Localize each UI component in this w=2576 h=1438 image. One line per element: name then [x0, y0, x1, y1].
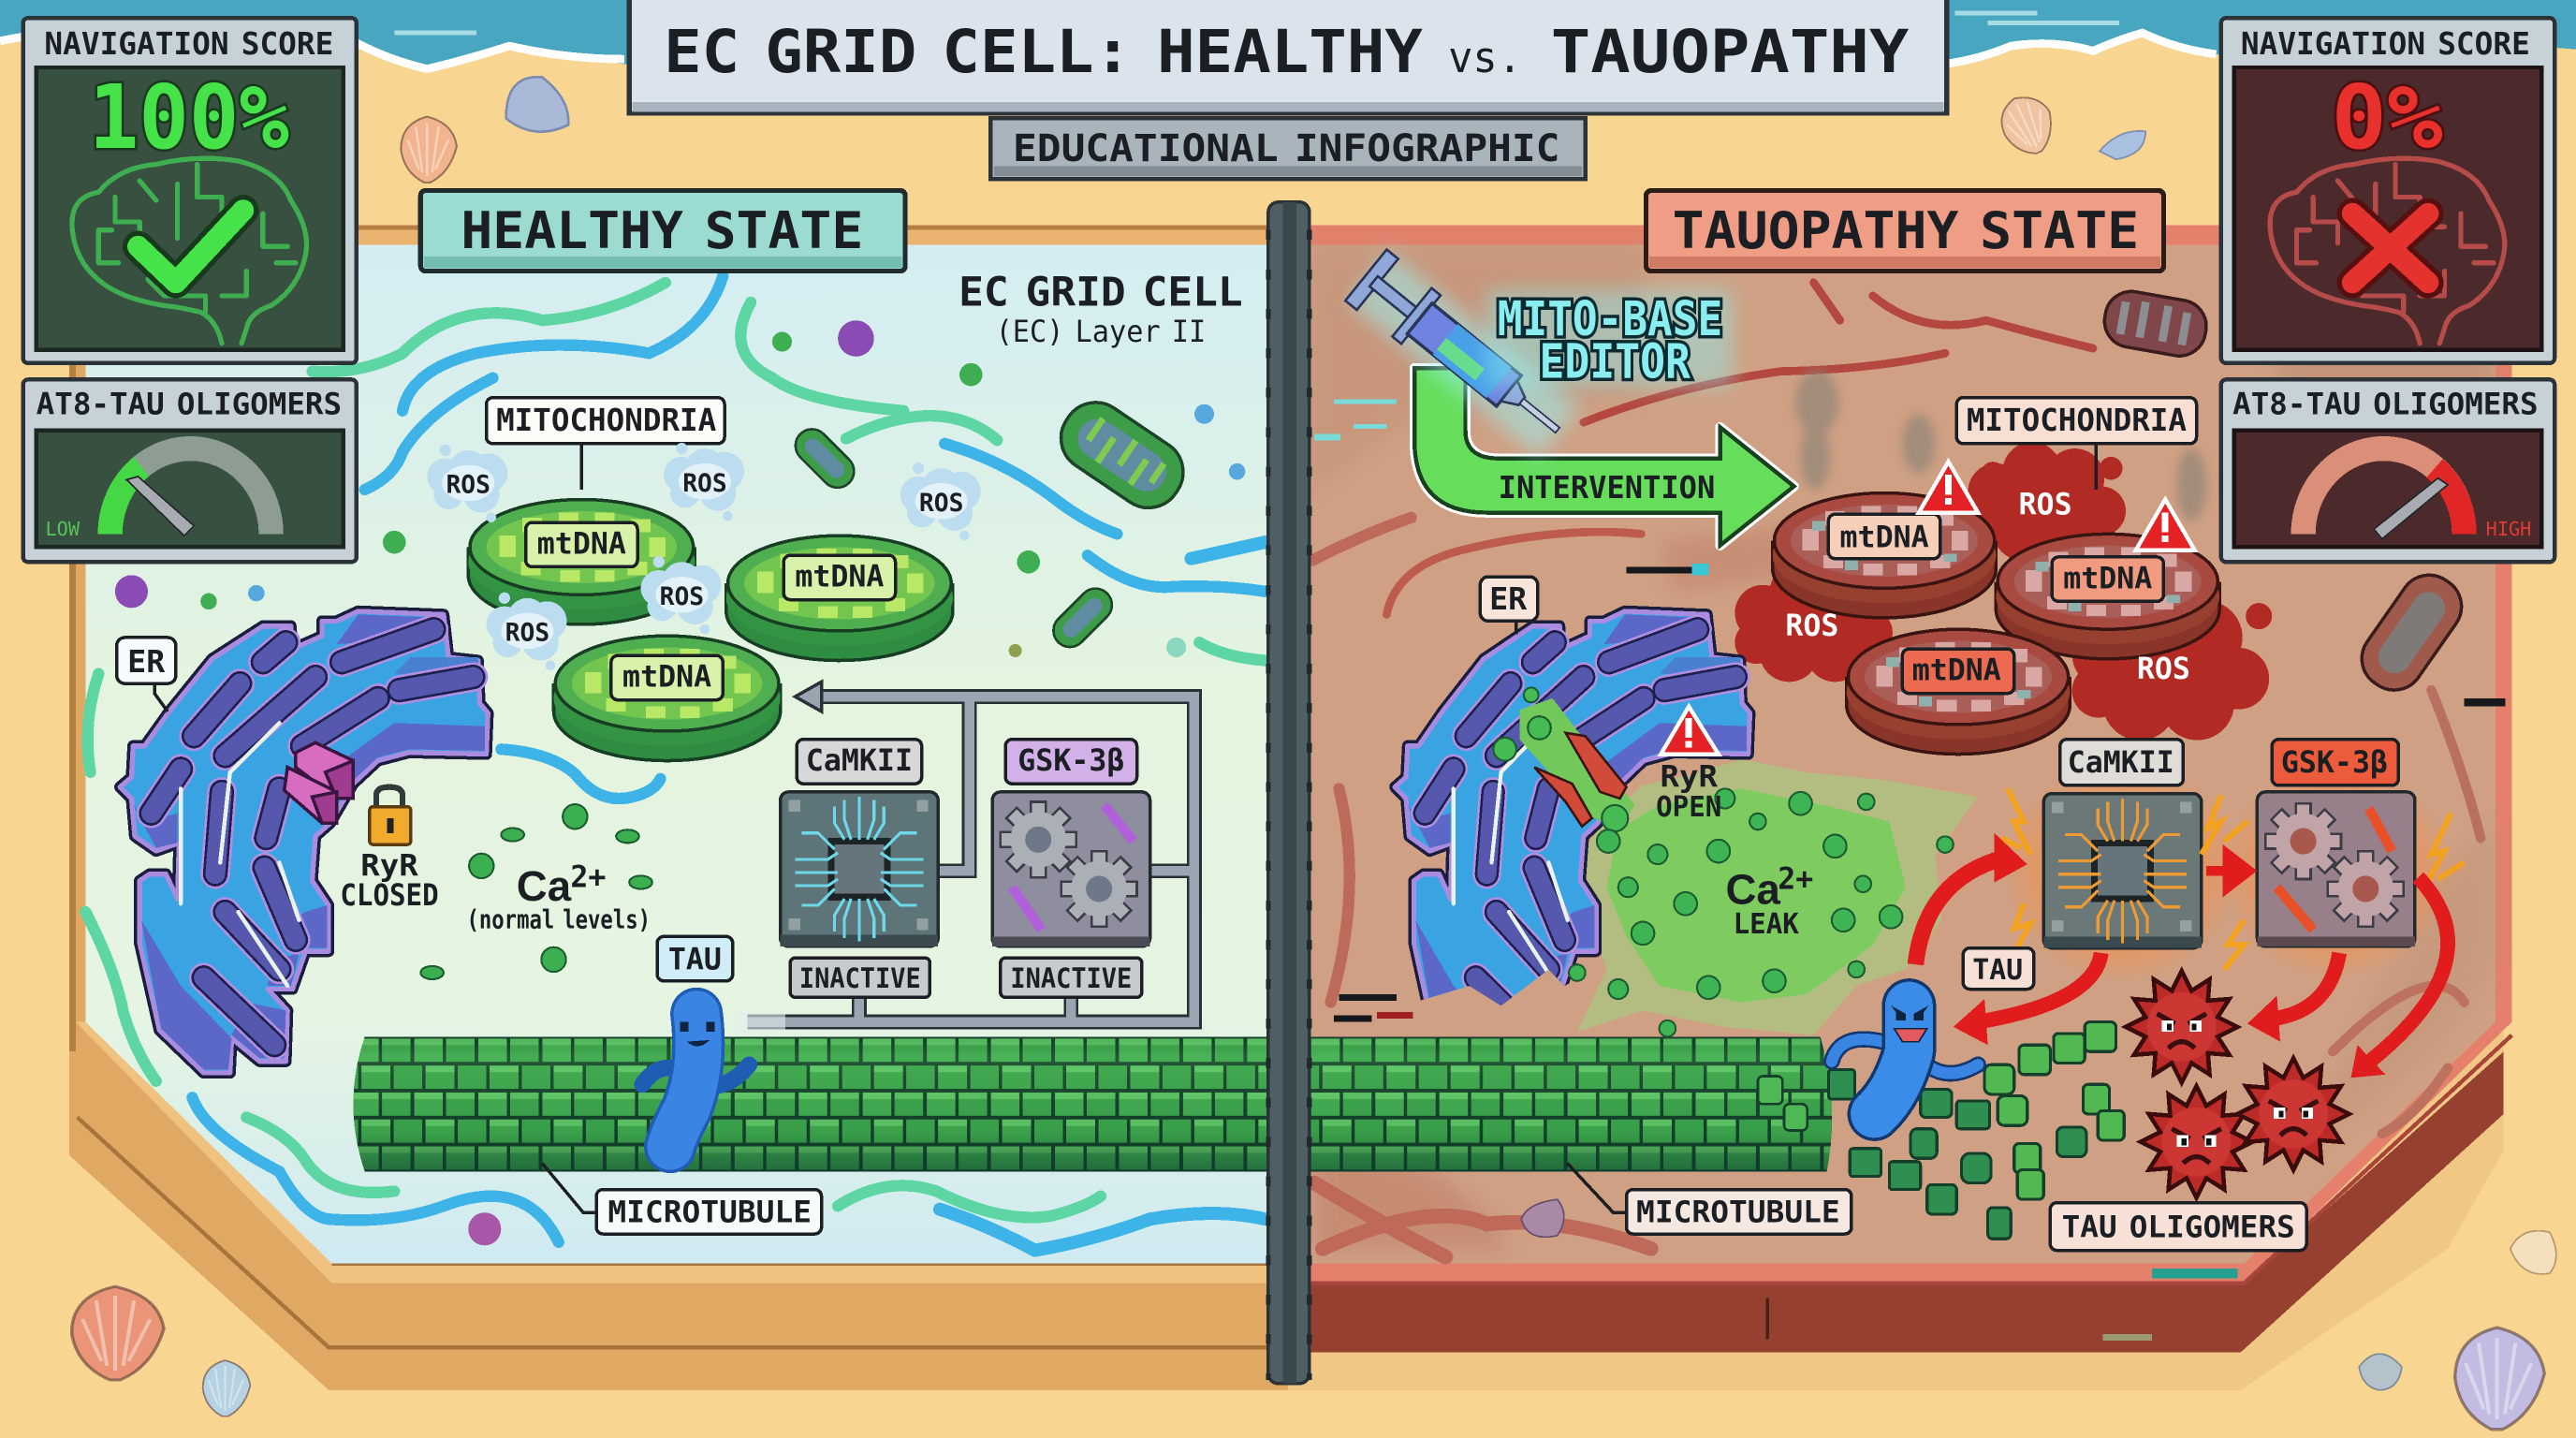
label: ER: ER	[127, 643, 166, 680]
label: ER	[1480, 577, 1538, 634]
tau protein healthy	[642, 936, 749, 1147]
title panel	[629, 0, 1947, 113]
disc 1: mtDNA	[1840, 521, 1929, 554]
cell interior tauopathy	[1310, 244, 2496, 1264]
disc 1	[468, 500, 695, 624]
pathway lines healthy	[736, 682, 1194, 1032]
GSK-3 beta active	[2221, 740, 2452, 979]
arrow: tau to CaMKII	[1915, 833, 2027, 964]
RyR open label: OPEN	[1656, 791, 1721, 824]
GSK-3 beta inactive	[992, 740, 1150, 997]
high label: HIGH	[2486, 518, 2531, 540]
shell: peach top right	[1993, 87, 2063, 162]
calcium leak label: LEAK	[1734, 908, 1799, 941]
ROS bubbles healthy: ROS	[682, 470, 727, 498]
title panel: TAUOPATHY	[1551, 17, 1909, 86]
calcium label healthy: 2+	[570, 861, 606, 895]
label: EC grid cell	[959, 269, 1243, 349]
calcium leak label: Ca	[1726, 865, 1780, 913]
RyR closed label: RyR	[360, 849, 419, 883]
label: mitochondria	[487, 398, 724, 490]
arrow: CaMKII to GSK	[2206, 855, 2249, 888]
disc 2	[1996, 534, 2219, 659]
mitochondria healthy	[468, 398, 953, 761]
healthy state banner	[420, 191, 905, 271]
panel: AT8-tau gauge tauopathy	[2221, 379, 2554, 562]
chip	[2043, 794, 2202, 948]
cell base right	[1288, 225, 2511, 1390]
label: ER	[117, 638, 176, 712]
interior tauopathy mottling	[1310, 246, 2496, 1249]
disc 3	[1847, 629, 2070, 755]
label: mitochondria: MITOCHONDRIA	[1967, 402, 2187, 438]
tau protein tauopathy	[1832, 948, 2034, 1114]
label: CaMKII: CaMKII	[2068, 746, 2174, 780]
lilac rock	[1521, 1199, 1564, 1237]
floating organelles healthy	[115, 320, 1245, 1245]
open RyR	[1534, 733, 1627, 827]
panel: navigation score healthy	[23, 18, 357, 363]
panel: navigation score healthy: NAVIGATION SCORE	[44, 25, 333, 62]
label: microtubule tauopathy	[1567, 1164, 1852, 1234]
green leak channel	[1519, 698, 1634, 829]
right damage streaks	[1312, 283, 2481, 1257]
arrow: CaMKII to tau	[1954, 953, 2101, 1045]
red feedback arrows	[1915, 833, 2448, 1078]
endoplasmic reticulum tauopathy	[1389, 575, 1756, 1005]
panel: AT8-tau gauge tauopathy: AT8-TAU OLIGOMERS	[2232, 386, 2539, 421]
label: GSK-3β	[1005, 740, 1137, 784]
calcium leak cloud	[1573, 759, 1978, 1035]
ROS labels: ROS	[1785, 609, 1838, 643]
label: GSK-3β	[2272, 740, 2398, 785]
calcium label healthy	[466, 861, 651, 935]
brain icon	[72, 158, 307, 344]
warning triangle 1	[1919, 462, 1978, 513]
label: TAU: TAU	[668, 943, 722, 976]
label: mitochondria: MITOCHONDRIA	[496, 402, 716, 438]
panel: navigation score tauopathy	[2221, 18, 2554, 363]
disc 2: mtDNA	[795, 561, 884, 594]
shell: blue rock top	[506, 77, 568, 132]
label: microtubule healthy: MICROTUBULE	[607, 1196, 812, 1230]
ROS bubbles healthy	[427, 443, 981, 670]
score value: 100%	[89, 66, 289, 169]
label: tau oligomers: TAU OLIGOMERS	[2062, 1211, 2295, 1245]
label: mito-base editor: MITO-BASE	[1498, 292, 1722, 347]
shell: coral large	[72, 1286, 164, 1380]
x icon	[2352, 213, 2428, 283]
ROS labels	[1785, 488, 2190, 686]
syringe	[1345, 250, 1581, 458]
calcium leak label: 2+	[1778, 862, 1813, 896]
lock icon	[370, 787, 411, 844]
shell: cream pebble	[2510, 1231, 2556, 1274]
endoplasmic reticulum healthy	[117, 611, 488, 1073]
panel: AT8-tau gauge healthy	[23, 379, 357, 562]
label: TAU	[1963, 948, 2034, 990]
label: ER: ER	[1489, 580, 1528, 617]
label: CaMKII	[2060, 740, 2183, 785]
cell interior healthy	[85, 244, 1266, 1264]
RyR open label	[1656, 761, 1721, 824]
ROS bubbles healthy: ROS	[446, 472, 490, 500]
ROS bubbles healthy: ROS	[660, 583, 704, 611]
calcium dots healthy	[420, 804, 652, 979]
label: TAU: TAU	[1972, 954, 2023, 987]
shell: light blue	[203, 1360, 250, 1416]
score value: 0%	[2331, 66, 2443, 169]
arrow: GSK to oligomer	[2247, 953, 2339, 1042]
calcium dots leak	[1569, 788, 1954, 1036]
disc 3: mtDNA	[622, 661, 711, 695]
center divider	[1268, 202, 1310, 1384]
lightning sparks	[2001, 788, 2465, 969]
label: inactive: INACTIVE	[1010, 962, 1132, 994]
green calcium beads	[1493, 687, 1628, 831]
ROS labels: ROS	[2019, 488, 2072, 521]
low label: LOW	[46, 518, 80, 540]
panel: AT8-tau gauge healthy: AT8-TAU OLIGOMERS	[37, 386, 342, 421]
label: microtubule healthy	[542, 1164, 822, 1234]
gauge arc	[2304, 448, 2465, 534]
warning triangle 2	[2136, 500, 2195, 550]
shell: peach top left	[401, 117, 457, 183]
RyR closed label	[340, 849, 439, 913]
calcium leak label	[1726, 862, 1813, 941]
tau oligomers	[2050, 971, 2349, 1251]
RyR closed label: CLOSED	[340, 879, 439, 913]
label: TAU	[657, 936, 733, 981]
disc 1	[1773, 493, 1996, 618]
healthy state banner: HEALTHY STATE	[461, 201, 863, 260]
label: GSK-3β: GSK-3β	[2281, 746, 2388, 780]
disc 2: mtDNA	[2063, 562, 2152, 595]
chip	[781, 792, 938, 946]
ROS clouds	[1734, 442, 2272, 741]
label: microtubule tauopathy: MICROTUBULE	[1636, 1196, 1840, 1230]
intervention arrow	[1414, 368, 1794, 546]
vesicle dots	[115, 320, 874, 1245]
panel: navigation score tauopathy: NAVIGATION SCORE	[2241, 25, 2530, 62]
label: tau oligomers	[2050, 1203, 2306, 1251]
gauge needle	[126, 477, 194, 536]
microtubule tauopathy	[1310, 1036, 1832, 1171]
label: GSK-3β: GSK-3β	[1017, 744, 1124, 778]
warning triangle	[1661, 707, 1719, 755]
shell: lilac large	[2455, 1328, 2544, 1430]
damaged mitochondrion right	[2350, 564, 2473, 701]
tauopathy state banner: TAUOPATHY STATE	[1673, 201, 2139, 260]
brain icon	[2270, 158, 2505, 344]
tubule fragments	[1828, 1022, 2124, 1239]
label: mitochondria	[1956, 398, 2197, 490]
label: CaMKII	[797, 740, 922, 784]
glitch fragments	[1314, 399, 2505, 1341]
ROS bubbles healthy: ROS	[919, 490, 963, 518]
check icon	[138, 211, 243, 283]
shell: gray pebble	[2359, 1354, 2402, 1390]
title panel: EC GRID CELL: HEALTHY	[664, 17, 1423, 86]
subtitle panel: EDUCATIONAL INFOGRAPHIC	[1013, 126, 1559, 170]
ROS bubbles healthy: ROS	[505, 619, 549, 647]
small mitochondrion	[789, 422, 861, 494]
ocean and foam	[0, 0, 2576, 69]
mitochondria tauopathy	[1734, 398, 2272, 755]
smoke	[1795, 370, 2206, 521]
big mitochondrion	[1048, 389, 1196, 521]
CaMKII inactive	[781, 740, 938, 997]
RyR channel	[285, 742, 353, 823]
label: EC grid cell: EC GRID CELL	[959, 269, 1243, 315]
disc 3	[554, 636, 781, 761]
gauge needle	[2374, 478, 2448, 539]
title panel: vs.	[1448, 33, 1522, 82]
calcium label healthy: (normal levels)	[466, 906, 651, 935]
label: EC grid cell: (EC) Layer II	[996, 315, 1206, 349]
calcium label healthy: Ca	[517, 862, 572, 910]
shell: blue pebble top right	[2100, 131, 2145, 159]
CaMKII active	[2004, 740, 2241, 983]
label: mito-base editor: EDITOR	[1540, 335, 1690, 390]
ROS labels: ROS	[2137, 653, 2190, 686]
tauopathy state banner	[1647, 191, 2163, 271]
gears panel	[2257, 792, 2415, 946]
arrow: GSK to far oligomer	[2351, 877, 2448, 1078]
left cytoplasm streams	[85, 276, 1265, 1251]
disc 3: mtDNA	[1912, 654, 2001, 688]
disc 1: mtDNA	[537, 527, 626, 561]
label: CaMKII: CaMKII	[806, 744, 913, 778]
intervention arrow: INTERVENTION	[1499, 469, 1715, 506]
gauge arc	[110, 448, 271, 534]
label: mito-base editor	[1486, 289, 1734, 390]
microtubule healthy	[353, 1036, 1268, 1171]
disc 2	[726, 536, 953, 661]
subtitle panel	[990, 118, 1586, 179]
label: inactive: INACTIVE	[799, 962, 921, 994]
damaged mitochondria floating	[2100, 287, 2473, 701]
gears panel	[992, 792, 1150, 946]
cell base left	[69, 225, 1288, 1390]
small mitochondrion	[1046, 581, 1119, 653]
damaged mitochondrion top	[2100, 287, 2210, 360]
RyR open label: RyR	[1661, 761, 1719, 795]
